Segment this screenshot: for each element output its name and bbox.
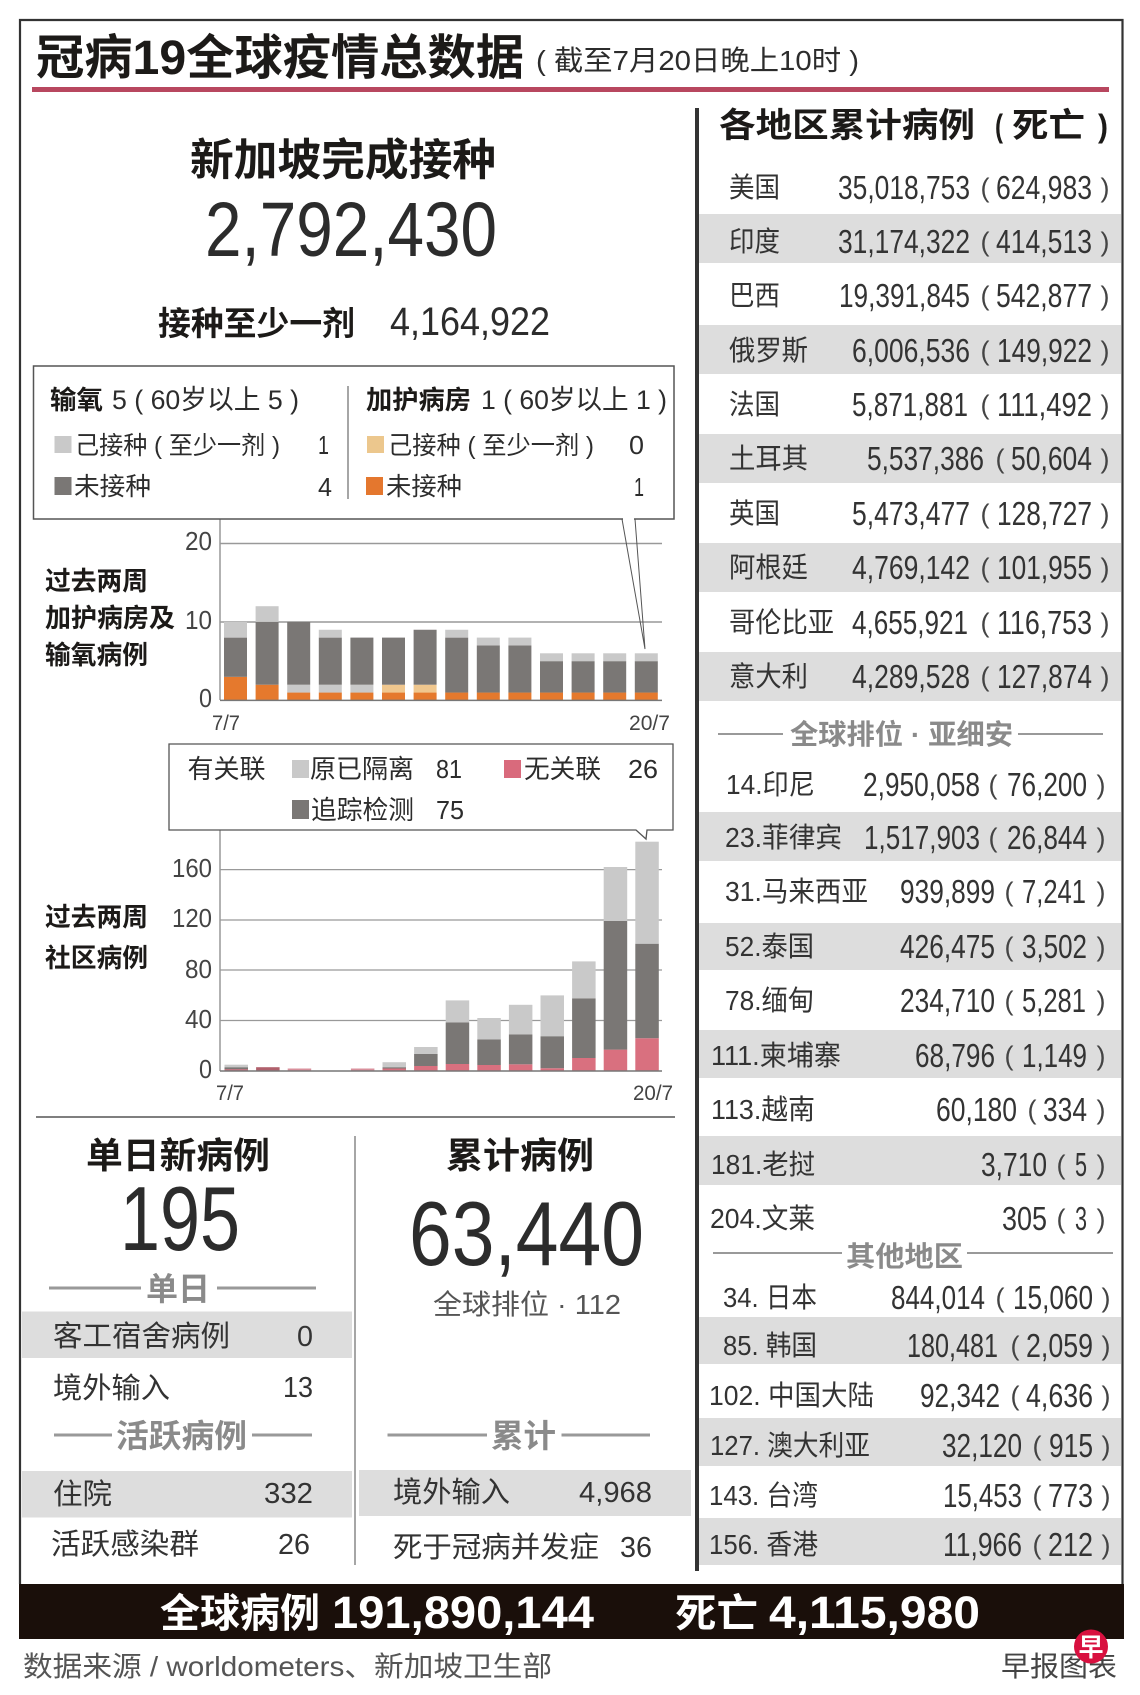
row: Hong Kong: ) — [1102, 1530, 1110, 1560]
chart label: ICU and oxygen: 过去两周 — [45, 566, 148, 596]
row: China mainland: 92,342 — [920, 1377, 1000, 1414]
global totals bar: 全球病例 — [160, 1592, 320, 1636]
row: Vietnam: ( — [1028, 1095, 1036, 1125]
callout: oxygen and ICU breakdown: 4 — [318, 472, 332, 502]
source note: 数据来源 / worldometers、新加坡卫生部 — [23, 1651, 552, 1682]
bar chart: ICU and oxygen cases: 7/7 — [212, 712, 240, 735]
callout: oxygen and ICU breakdown: 0 — [629, 430, 644, 460]
row: France: 法国 — [729, 389, 780, 420]
row: India: 414,513 — [996, 223, 1092, 260]
row: Myanmar: ) — [1096, 986, 1106, 1016]
row bands — [699, 214, 1121, 1565]
chart label: ICU and oxygen: 输氧病例 — [45, 640, 148, 670]
row: imported: 13 — [283, 1372, 313, 1404]
row: Colombia: 4,655,921 — [852, 604, 968, 641]
row: UK — [729, 495, 1110, 532]
row: Vietnam: 60,180 — [936, 1091, 1017, 1128]
row: Taiwan: ( — [1032, 1481, 1042, 1511]
row: Brazil: ) — [1100, 281, 1110, 311]
callout: oxygen and ICU breakdown: 1 — [634, 472, 644, 502]
row: Brazil: 巴西 — [729, 280, 780, 311]
callout: oxygen and ICU breakdown: 1 ( 60岁以上 1 ) — [481, 385, 667, 415]
region heading: 死亡 — [1012, 107, 1085, 145]
region heading: 各地区累计病例 — [719, 107, 975, 145]
bar chart: community cases: 40 — [185, 1004, 212, 1034]
row: Taiwan: 143. 台湾 — [709, 1480, 818, 1511]
row: Hong Kong: 212 — [1048, 1526, 1093, 1563]
row: South Korea — [723, 1327, 1110, 1364]
row: Myanmar: 5,281 — [1022, 982, 1086, 1019]
row: Malaysia: 7,241 — [1022, 873, 1086, 910]
callout: community case breakdown: 有关联 — [188, 754, 266, 784]
row: Japan: ( — [996, 1283, 1004, 1313]
row: Australia: 915 — [1049, 1427, 1093, 1464]
panel: cumulative cases: 累计病例 — [446, 1135, 594, 1176]
callout: oxygen and ICU breakdown: 加护病房 — [366, 385, 471, 415]
row: Russia: 6,006,536 — [852, 332, 970, 369]
row: Brunei: ) — [1096, 1204, 1106, 1234]
row: Brunei: 305 — [1002, 1200, 1047, 1237]
row: Malaysia: 31.马来西亚 — [725, 876, 868, 907]
subheading: active cases: 活跃病例 — [116, 1418, 247, 1454]
row: Laos: 3,710 — [981, 1146, 1047, 1183]
row: Thailand: ) — [1096, 932, 1106, 962]
row: hospitalised — [22, 1471, 352, 1518]
row: Taiwan: 773 — [1048, 1477, 1093, 1514]
subheading: daily — [49, 1271, 316, 1307]
row: Taiwan — [709, 1477, 1110, 1514]
title — [36, 32, 859, 85]
row: Argentina: 4,769,142 — [852, 549, 970, 586]
row: France: ( — [980, 390, 990, 420]
row: active clusters — [51, 1528, 310, 1561]
row: Brazil: 542,877 — [996, 277, 1092, 314]
callout: oxygen and ICU breakdown: 输氧 — [50, 385, 103, 415]
row: Hong Kong: 156. 香港 — [709, 1529, 818, 1560]
bar chart: community cases — [172, 830, 673, 1105]
row: China mainland: ( — [1010, 1381, 1020, 1411]
row: Vietnam: ) — [1096, 1095, 1106, 1125]
credit: Zaobao graphics: 早报图表 — [1001, 1651, 1117, 1682]
row: Malaysia — [725, 873, 1106, 910]
row: Brunei: ( — [1056, 1204, 1066, 1234]
row: Japan: 15,060 — [1013, 1279, 1093, 1316]
callout: community case breakdown: 追踪检测 — [311, 795, 414, 825]
bar chart: community cases: 20/7 — [633, 1082, 673, 1105]
panel: vaccination headline: 4,164,922 — [390, 300, 550, 344]
row: Russia — [729, 332, 1110, 369]
legend: vaccinated ICU — [367, 436, 384, 453]
subheading: active cases — [54, 1418, 312, 1454]
bar chart: ICU and oxygen cases: 0 — [199, 683, 212, 713]
row: Cambodia: 1,149 — [1022, 1037, 1087, 1074]
row: dormitory cases: 客工宿舍病例 — [53, 1320, 230, 1353]
bar chart: community cases: 0 — [199, 1054, 212, 1084]
row: Indonesia — [726, 766, 1106, 803]
subheading: daily: 单日 — [146, 1271, 210, 1307]
row: Vietnam: 113.越南 — [711, 1094, 815, 1125]
row: Italy: 127,874 — [997, 658, 1092, 695]
global totals bar: 191,890,144 — [332, 1587, 594, 1638]
row: Italy: ( — [980, 662, 990, 692]
row: Japan: 844,014 — [891, 1279, 985, 1316]
row: Thailand: 3,502 — [1022, 928, 1087, 965]
row: Cambodia: 68,796 — [915, 1037, 995, 1074]
row: Turkey: ( — [996, 444, 1004, 474]
row: Argentina: ( — [980, 553, 990, 583]
chart label: community cases: 社区病例 — [45, 943, 148, 973]
row: hospitalised: 332 — [264, 1478, 313, 1510]
row: Russia: 俄罗斯 — [729, 335, 808, 366]
row: Cambodia: ( — [1004, 1041, 1014, 1071]
row: Laos: ) — [1096, 1150, 1106, 1180]
row: Colombia: 哥伦比亚 — [729, 607, 834, 638]
row: Japan: 34. 日本 — [723, 1282, 817, 1313]
legend: unvaccinated oxygen — [54, 477, 72, 495]
row: Indonesia: ) — [1096, 770, 1106, 800]
callout: community case breakdown — [169, 744, 673, 839]
subheading: cumulative: 累计 — [491, 1418, 556, 1454]
row: China mainland: 102. 中国大陆 — [709, 1380, 874, 1411]
subheading: other regions: 其他地区 — [846, 1241, 963, 1272]
row: Indonesia: 2,950,058 — [863, 766, 980, 803]
row: Turkey: 50,604 — [1011, 440, 1092, 477]
row: Laos — [711, 1146, 1106, 1183]
title: ( 截至7月20日晚上10时 ) — [536, 45, 859, 76]
row: Brunei: 3 — [1075, 1200, 1087, 1237]
row: Japan: ) — [1102, 1283, 1110, 1313]
row: Myanmar — [725, 982, 1106, 1019]
panel: vaccination headline: 2,792,430 — [205, 187, 497, 273]
row: Thailand: 52.泰国 — [725, 931, 814, 962]
row: France — [729, 386, 1110, 423]
row: imported: 境外输入 — [53, 1372, 170, 1405]
row: Colombia: ) — [1100, 608, 1110, 638]
row: Hong Kong: 11,966 — [943, 1526, 1022, 1563]
row: USA: 美国 — [729, 172, 780, 203]
row: China mainland: ) — [1102, 1381, 1110, 1411]
row: Australia — [710, 1427, 1110, 1464]
row: Argentina: ) — [1100, 553, 1110, 583]
panel: vaccination headline — [158, 136, 550, 344]
region heading: ) — [1098, 108, 1108, 144]
row: Philippines — [725, 819, 1106, 856]
row: Brazil — [729, 277, 1110, 314]
bar chart: community cases: 120 — [172, 903, 212, 933]
row: France: 5,871,881 — [852, 386, 968, 423]
icon: Zaobao logo — [1074, 1630, 1108, 1664]
row: Indonesia: 76,200 — [1007, 766, 1087, 803]
panel: daily new cases: 195 — [120, 1169, 240, 1270]
row: Thailand: 426,475 — [900, 928, 995, 965]
panel: vaccination headline: 接种至少一剂 — [158, 305, 355, 342]
row: Italy: 意大利 — [729, 661, 808, 692]
row: UK: 128,727 — [997, 495, 1092, 532]
region heading — [719, 107, 1108, 145]
row: Taiwan: 15,453 — [943, 1477, 1022, 1514]
panel: daily new cases: 单日新病例 — [86, 1135, 270, 1176]
row: Argentina: 101,955 — [997, 549, 1092, 586]
legend: unlinked — [504, 760, 521, 778]
callout: oxygen and ICU breakdown: 己接种 ( 至少一剂 ) — [388, 432, 594, 460]
row: China mainland: 4,636 — [1026, 1377, 1093, 1414]
row: India: ( — [980, 227, 990, 257]
row: India: 印度 — [729, 226, 780, 257]
row: Argentina: 阿根廷 — [729, 552, 808, 583]
row: UK: 5,473,477 — [852, 495, 970, 532]
row: UK: 英国 — [729, 498, 780, 529]
chart label: ICU and oxygen: 加护病房及 — [45, 603, 175, 633]
row: imported total — [359, 1470, 691, 1516]
chart label: ICU and oxygen — [45, 566, 175, 670]
row: Indonesia: ( — [988, 770, 998, 800]
row: imported total: 境外输入 — [393, 1476, 510, 1509]
row: hospitalised: 住院 — [53, 1478, 112, 1511]
row: Thailand: ( — [1004, 932, 1014, 962]
panel: cases by region — [695, 107, 1121, 1571]
row: Australia: ( — [1032, 1431, 1042, 1461]
row: India: ) — [1100, 227, 1110, 257]
row: USA: 35,018,753 — [838, 169, 970, 206]
row: USA: 624,983 — [996, 169, 1092, 206]
row: Turkey — [729, 440, 1110, 477]
callout: oxygen and ICU breakdown: 未接种 — [386, 473, 462, 501]
row: USA: ) — [1100, 173, 1110, 203]
panel: cumulative cases: 全球排位 · 112 — [433, 1289, 621, 1320]
callout: oxygen and ICU breakdown — [34, 366, 674, 649]
row: active clusters: 26 — [278, 1529, 310, 1561]
callout: community case breakdown: 26 — [628, 754, 658, 784]
row: Argentina — [729, 549, 1110, 586]
row: South Korea: ( — [1010, 1331, 1020, 1361]
row: Turkey: 5,537,386 — [867, 440, 984, 477]
row: Brunei — [710, 1200, 1106, 1237]
row: South Korea: 180,481 — [907, 1327, 998, 1364]
panel: cumulative cases: 63,440 — [409, 1184, 644, 1285]
row: Malaysia: ) — [1096, 877, 1106, 907]
row: Italy: 4,289,528 — [852, 658, 970, 695]
callout: community case breakdown: 无关联 — [524, 754, 601, 784]
global totals bar: 死亡 — [675, 1592, 758, 1636]
row: dormitory cases: 0 — [297, 1321, 313, 1353]
row: Italy: ) — [1100, 662, 1110, 692]
callout: community case breakdown: 原已隔离 — [310, 754, 414, 784]
bar chart: ICU and oxygen cases — [185, 519, 670, 735]
chart label: community cases: 过去两周 — [45, 902, 148, 932]
row: France: ) — [1100, 390, 1110, 420]
row: Colombia — [729, 604, 1110, 641]
row: deaths: 36 — [620, 1532, 652, 1564]
legend: quarantined — [292, 760, 309, 778]
row: Australia: ) — [1102, 1431, 1110, 1461]
row: Laos: ( — [1056, 1150, 1066, 1180]
row: Philippines: 1,517,903 — [864, 819, 980, 856]
row: Turkey: ) — [1100, 444, 1110, 474]
bar chart: community cases: 80 — [185, 954, 212, 984]
row: Italy — [729, 658, 1110, 695]
region heading: ( — [995, 108, 1003, 144]
row: UK: ( — [980, 499, 990, 529]
row: Laos: 181.老挝 — [711, 1149, 815, 1180]
row: Cambodia: 111.柬埔寨 — [711, 1040, 841, 1071]
row: South Korea: 2,059 — [1026, 1327, 1093, 1364]
callout: community case breakdown: 81 — [436, 754, 462, 784]
row: UK: ) — [1100, 499, 1110, 529]
row: Russia: ) — [1100, 336, 1110, 366]
row: Russia: ( — [980, 336, 990, 366]
row: Malaysia: 939,899 — [900, 873, 995, 910]
row: Brazil: 19,391,845 — [839, 277, 970, 314]
row: Myanmar: ( — [1004, 986, 1014, 1016]
icon: Zaobao logo: 早 — [1078, 1634, 1104, 1662]
row: Philippines: 23.菲律宾 — [725, 822, 842, 853]
row: Thailand — [725, 928, 1106, 965]
row: Vietnam: 334 — [1043, 1091, 1087, 1128]
panel: vaccination headline: 新加坡完成接种 — [190, 136, 496, 185]
row: Vietnam — [711, 1091, 1106, 1128]
row: South Korea: ) — [1102, 1331, 1110, 1361]
row: Colombia: 116,753 — [997, 604, 1092, 641]
row: India: 31,174,322 — [838, 223, 970, 260]
global totals bar: 4,115,980 — [769, 1587, 980, 1638]
row: deaths: 死于冠病并发症 — [393, 1531, 599, 1564]
panel: daily new cases — [22, 1135, 352, 1561]
bar chart: ICU and oxygen cases: 20/7 — [629, 712, 670, 735]
row: India — [729, 223, 1110, 260]
legend: contact tracing — [292, 800, 309, 819]
callout: oxygen and ICU breakdown: 未接种 — [74, 473, 151, 501]
row: Philippines: ( — [988, 823, 998, 853]
row: USA — [729, 169, 1110, 206]
callout: community case breakdown: 75 — [436, 795, 464, 825]
row: France: 111,492 — [997, 386, 1092, 423]
row: active clusters: 活跃感染群 — [51, 1528, 199, 1561]
row: Cambodia: ) — [1096, 1041, 1106, 1071]
row: Australia: 32,120 — [942, 1427, 1022, 1464]
row: Myanmar: 234,710 — [900, 982, 995, 1019]
row: Taiwan: ) — [1102, 1481, 1110, 1511]
row: imported — [53, 1372, 313, 1405]
row: China mainland — [709, 1377, 1110, 1414]
row: Australia: 127. 澳大利亚 — [710, 1430, 870, 1461]
callout: oxygen and ICU breakdown: 己接种 ( 至少一剂 ) — [75, 432, 280, 460]
subheading: ASEAN ranking: 全球排位 · 亚细安 — [790, 718, 1013, 750]
row: Brunei: 204.文莱 — [710, 1203, 815, 1234]
title: 冠病19全球疫情总数据 — [36, 32, 524, 85]
row: Cambodia — [711, 1037, 1106, 1074]
chart label: community cases — [45, 902, 148, 973]
row: Malaysia: ( — [1004, 877, 1014, 907]
row: Hong Kong — [709, 1526, 1110, 1563]
legend: vaccinated oxygen — [54, 436, 72, 453]
callout: oxygen and ICU breakdown: 1 — [318, 430, 329, 460]
row: Indonesia: 14.印尼 — [726, 769, 815, 800]
legend: unvaccinated ICU — [366, 477, 383, 495]
row: USA: ( — [980, 173, 990, 203]
bar chart: ICU and oxygen cases: 20 — [185, 526, 212, 556]
row: Colombia: ( — [980, 608, 990, 638]
row: Laos: 5 — [1075, 1146, 1087, 1183]
row: imported total: 4,968 — [579, 1477, 652, 1509]
row: Myanmar: 78.缅甸 — [725, 985, 814, 1016]
row: Russia: 149,922 — [997, 332, 1092, 369]
row: dormitory cases — [22, 1312, 352, 1358]
row: Japan — [723, 1279, 1110, 1316]
callout: oxygen and ICU breakdown: 5 ( 60岁以上 5 ) — [112, 385, 299, 415]
row: Philippines: ) — [1096, 823, 1106, 853]
row: Philippines: 26,844 — [1007, 819, 1087, 856]
bar chart: ICU and oxygen cases: 10 — [185, 605, 212, 635]
panel: cumulative cases — [359, 1135, 691, 1564]
subheading: cumulative — [388, 1418, 650, 1454]
bar chart: community cases: 160 — [172, 853, 212, 883]
global totals bar — [19, 1584, 1124, 1639]
row: Brazil: ( — [980, 281, 990, 311]
row: Turkey: 土耳其 — [729, 443, 808, 474]
bar chart: community cases: 7/7 — [216, 1082, 244, 1105]
row: South Korea: 85. 韩国 — [723, 1330, 817, 1361]
row: Hong Kong: ( — [1032, 1530, 1042, 1560]
